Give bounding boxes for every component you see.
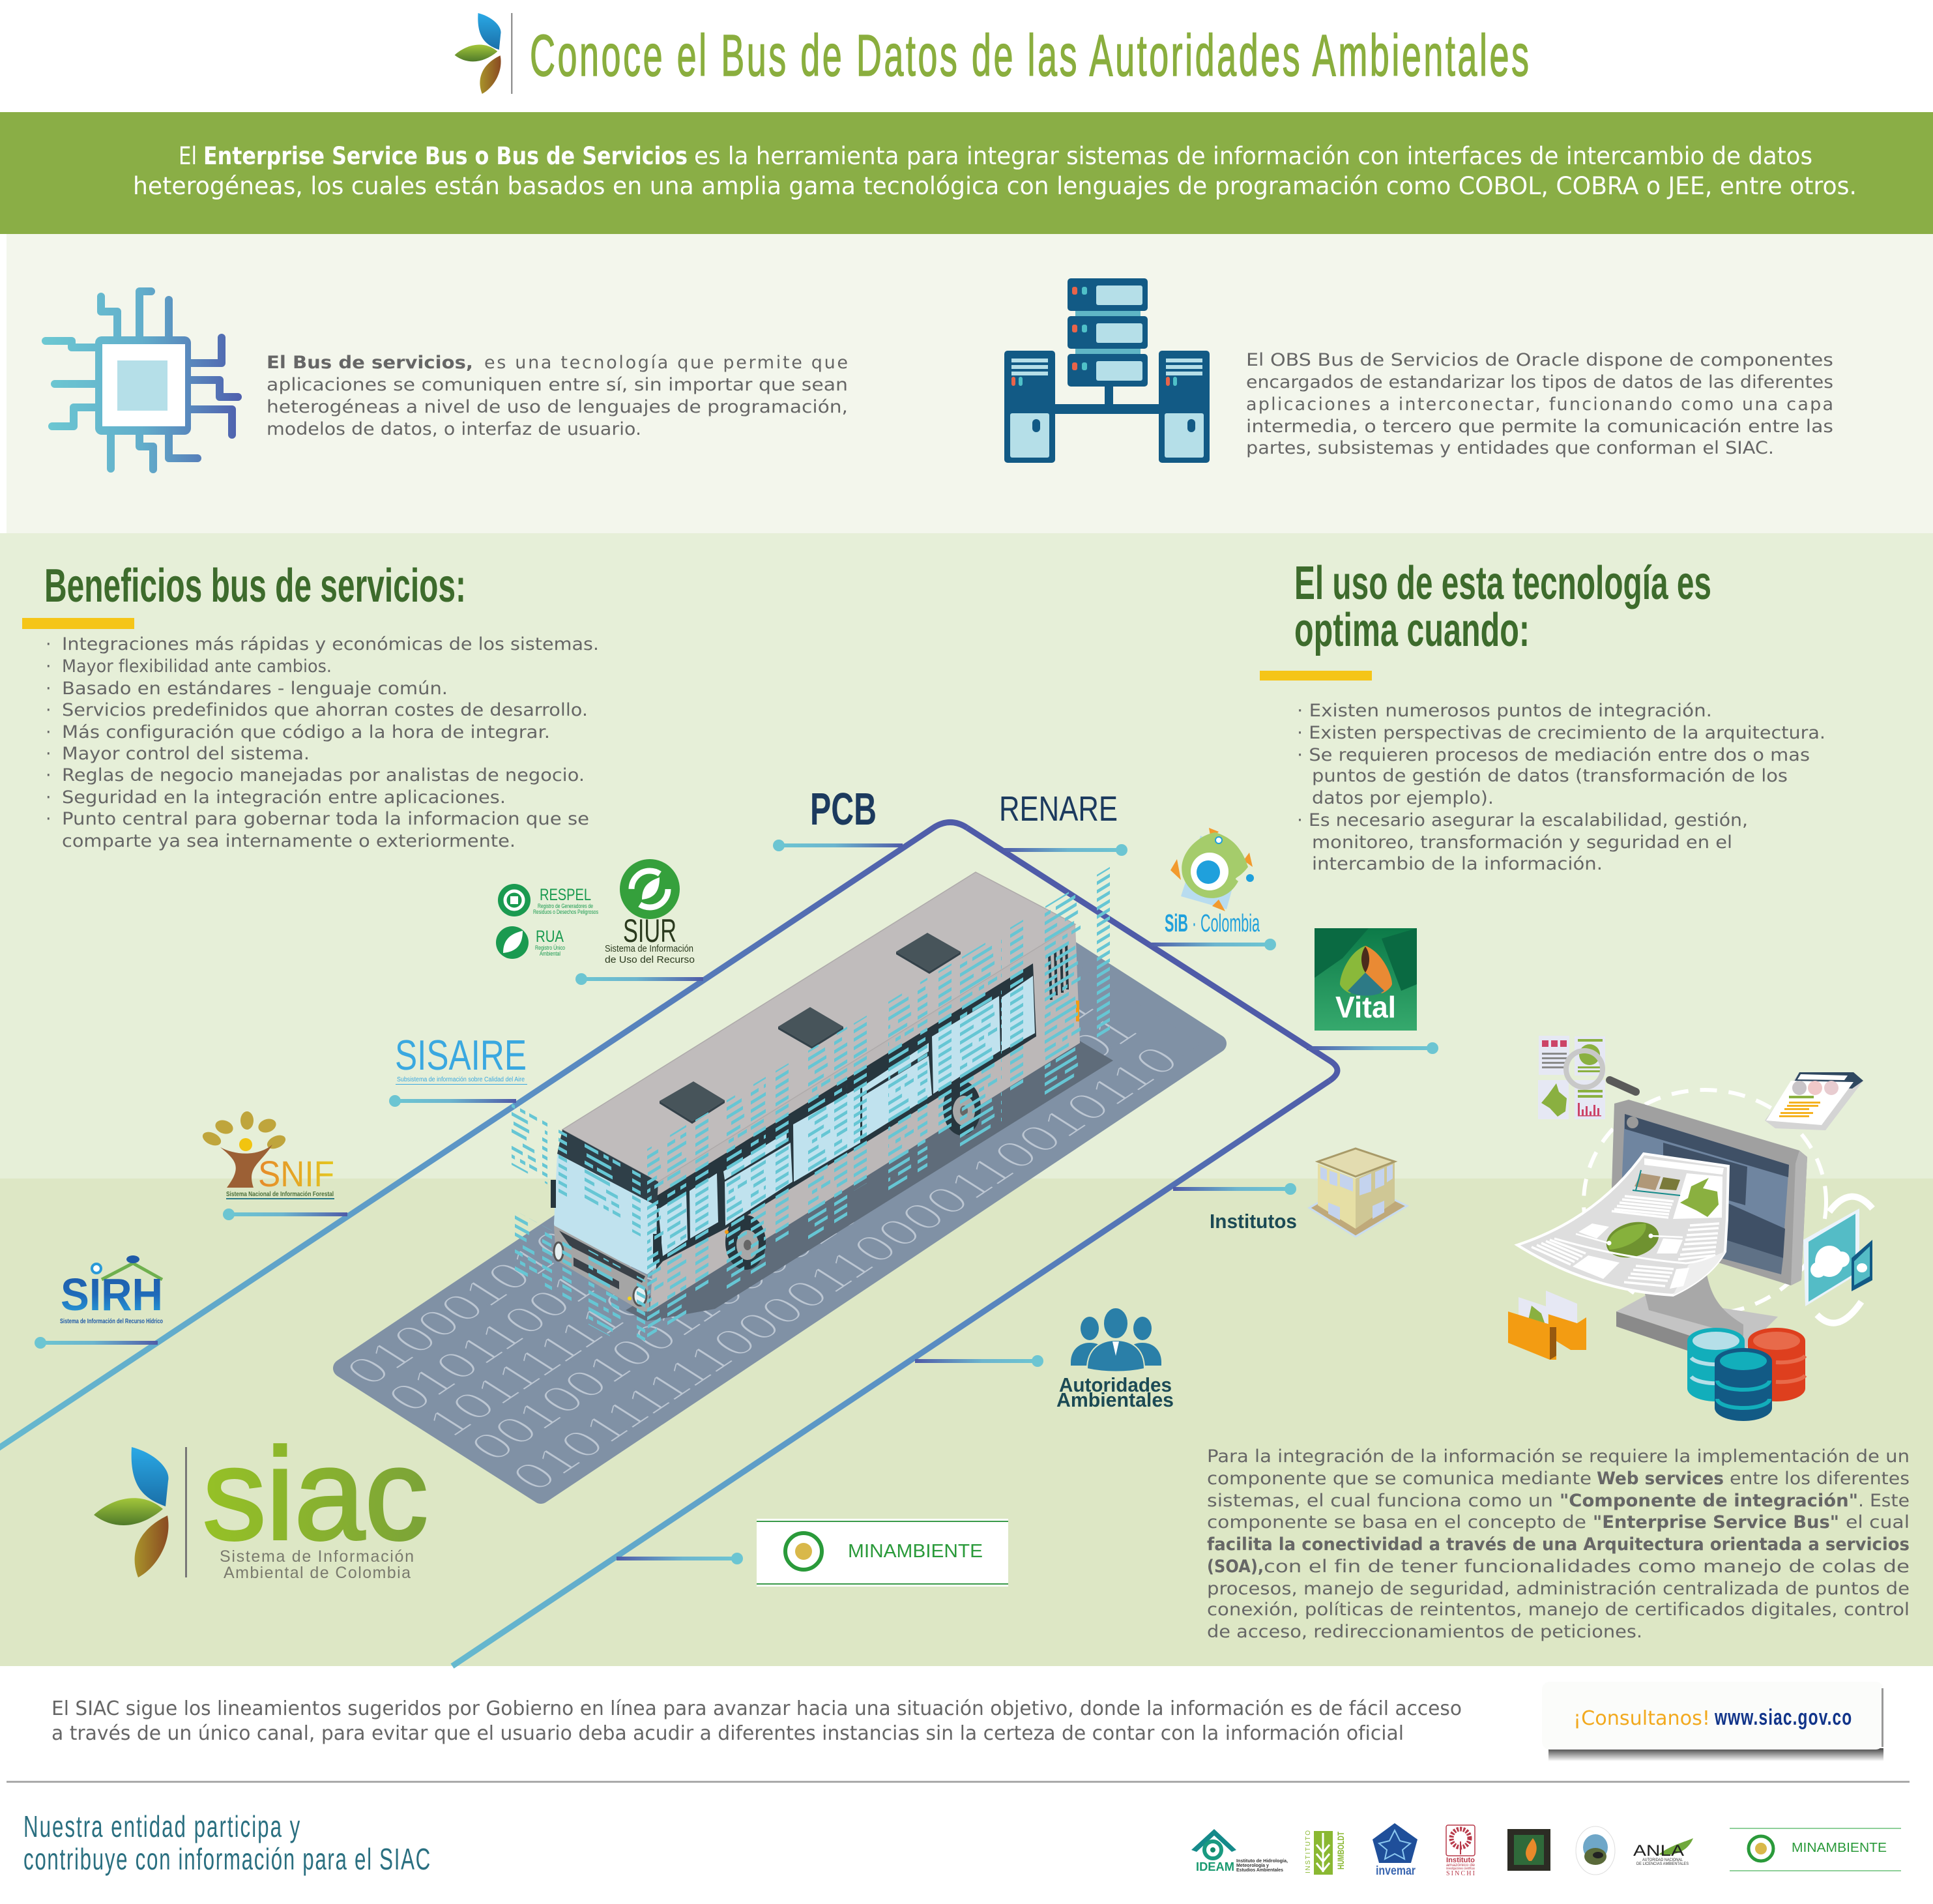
list: beneficios: Seguridad en la integración entre aplicaciones. [62, 787, 506, 808]
list: beneficios: · [46, 722, 51, 742]
logo: RUA: Registro Único [535, 945, 565, 951]
title: Conoce el Bus de Datos de las Autoridades Ambientales [530, 23, 1529, 88]
label: Autoridades Ambientales: Ambientales [1056, 1388, 1174, 1411]
logo: Invemar: invemar [1376, 1864, 1416, 1878]
logo: Minambiente footer: MINAMBIENTE [1792, 1841, 1887, 1855]
text: El Bus de servicios: El Bus de servicios, [267, 353, 473, 373]
logo: ANLA: DE LICENCIAS AMBIENTALES [1636, 1862, 1689, 1866]
logo: SIAC large: Sistema de Información [220, 1547, 414, 1566]
label: PCB: PCB [810, 784, 877, 834]
text: integracion paragraph: componente se basa en el concepto de [1207, 1512, 1586, 1532]
logo: Minambiente box: MINAMBIENTE [848, 1541, 983, 1562]
text: OBS Oracle [1246, 350, 1833, 458]
text: integracion paragraph: entre los diferentes [1730, 1469, 1910, 1489]
list: beneficios: Servicios predefinidos que ahorran costes de desarrollo. [62, 700, 588, 720]
text: footer statement: El SIAC sigue los lineamientos sugeridos por Gobierno en línea para avanzar hacia una situación objetivo, donde la información es de fácil acceso [51, 1697, 1462, 1720]
connector: SIUR [575, 973, 703, 985]
list: beneficios: Mayor flexibilidad ante cambios. [62, 656, 332, 677]
logo: SIAC large [94, 1422, 428, 1582]
road with binary digits: 0010010011000010001010110001 [458, 1008, 1150, 1469]
text: integracion paragraph: el cual [1846, 1512, 1910, 1532]
text: footer statement: a través de un único canal, para evitar que el usuario deba acudir a diferentes instancias sin la certeza de contar con la información oficial [51, 1722, 1404, 1745]
connector: Minambiente [617, 1553, 743, 1564]
logo: SIRH: Sistema de Información del Recurso Hídrico [60, 1318, 163, 1325]
illustration: notebook [1765, 1072, 1863, 1130]
illustration: database cylinders [1687, 1328, 1805, 1421]
connector: Autoridades [915, 1355, 1043, 1367]
logo: SIRH: SIRH [61, 1269, 163, 1320]
list: beneficios: Punto central para gobernar toda la informacion que se [62, 809, 589, 829]
connector: SIRH [35, 1337, 158, 1349]
icon: servers [1004, 278, 1210, 463]
text: integracion paragraph: de acceso, redireccionamientos de peticiones. [1207, 1622, 1642, 1642]
heading: uso tecnologia: El uso de esta tecnología es [1294, 557, 1711, 609]
intro text: es la herramienta para integrar sistemas de información con interfaces de intercambio de datos [694, 142, 1812, 170]
heading: beneficios: Beneficios bus de servicios: [44, 560, 466, 612]
logo: IDEAM: Meteorología y [1236, 1862, 1270, 1868]
logo: Humboldt [1305, 1830, 1346, 1875]
text: El Bus de servicios: modelos de datos, o interfaz de usuario. [267, 419, 641, 439]
panel: intro band background [0, 112, 1933, 234]
logo: ANLA: AUTORIDAD NACIONAL [1642, 1858, 1683, 1862]
text: integracion paragraph: conexión, políticas de reintentos, manejo de certificados digitales, control [1207, 1600, 1910, 1620]
text: El Bus de servicios [267, 353, 848, 439]
text: OBS Oracle: aplicaciones a interconectar, funcionando como una capa [1246, 394, 1833, 415]
heading: uso tecnologia: optima cuando: [1294, 604, 1530, 656]
text: El Bus de servicios: heterogéneas a nivel de uso de lenguajes de programación, [267, 397, 848, 417]
list: beneficios: Integraciones más rápidas y económicas de los sistemas. [62, 634, 599, 654]
label: Autoridades Ambientales: Autoridades [1059, 1373, 1172, 1396]
panel: lower green background [0, 1179, 1933, 1666]
logo: Vital [1315, 928, 1417, 1031]
list: uso tecnologia: · Existen numerosos puntos de integración. [1297, 701, 1712, 721]
text: nuestra entidad: Nuestra entidad participa y [23, 1810, 300, 1844]
text: integracion paragraph [1207, 1446, 1910, 1642]
road with binary digits: 1011111100100011100101101001 [415, 984, 1107, 1444]
logo: SIUR: Sistema de Información [605, 943, 693, 954]
accent bar: uso [1260, 671, 1372, 681]
logo: Invemar [1373, 1823, 1417, 1878]
logo: Humboldt: INSTITUTO [1305, 1830, 1312, 1873]
logo: Minambiente footer [1730, 1828, 1901, 1871]
logo: Sinchi: Instituto [1446, 1856, 1475, 1864]
logo: header SIAC leaves [455, 13, 512, 94]
logo: ANLA [1633, 1838, 1693, 1866]
logo: SIUR [605, 859, 695, 965]
text: integracion paragraph: sistemas, el cual funciona como un [1207, 1491, 1553, 1511]
logo: Sinchi: investigaciones científicas [1446, 1867, 1475, 1871]
connector: RENARE [1002, 844, 1127, 856]
list: beneficios: · [46, 656, 51, 677]
logo: SIUR: SIUR [623, 913, 676, 949]
text: integracion paragraph: procesos, manejo de seguridad, administración centralizada de puntos de [1207, 1579, 1910, 1599]
label: RENARE: RENARE [999, 789, 1118, 828]
logo: Minambiente box [757, 1519, 1008, 1587]
logo: Vital: Vital [1335, 990, 1396, 1024]
bus illustration [551, 872, 1113, 1321]
list: beneficios: · [46, 765, 51, 785]
label: Institutos: Institutos [1210, 1210, 1297, 1233]
logo: SiB Colombia [1165, 828, 1260, 937]
list: uso tecnologia: intercambio de la información. [1312, 854, 1603, 874]
text: integracion paragraph: con el fin de tener funcionalidades como manejo de colas de [1264, 1557, 1910, 1577]
logo: SISAIRE: SISAIRE [395, 1031, 527, 1079]
list: uso tecnologia [1297, 701, 1825, 874]
connector: Institutos [1173, 1183, 1296, 1195]
list: beneficios: Basado en estándares - lenguaje común. [62, 679, 448, 699]
logo: Parques [1576, 1826, 1615, 1875]
logo: SiB Colombia: SiB · Colombia [1165, 910, 1260, 937]
logo: IDEAM: Estudios Ambientales [1236, 1867, 1283, 1873]
logo: IDEAM: IDEAM [1196, 1860, 1234, 1873]
illustration: tablet and phone [1803, 1197, 1872, 1323]
logo: SIRH [60, 1255, 163, 1325]
text: nuestra entidad [23, 1810, 430, 1877]
logo: RESPEL [498, 884, 598, 916]
text: footer statement [51, 1697, 1462, 1745]
text: El Bus de servicios: es una tecnología que permite que [484, 353, 848, 373]
text: integracion paragraph: facilita la conectividad a través de una Arquitectura orientada a servicios [1207, 1534, 1910, 1555]
callout: consultanos [1542, 1682, 1883, 1761]
text: integracion paragraph: componente que se comunica mediante [1207, 1469, 1591, 1489]
connector: SISAIRE [389, 1095, 516, 1107]
accent bar: beneficios [22, 618, 134, 629]
logo: Humboldt: HUMBOLDT [1335, 1832, 1346, 1869]
road with binary digits [334, 916, 1217, 1499]
list: uso tecnologia: · Se requieren procesos de mediación entre dos o mas [1297, 745, 1810, 765]
label: Autoridades Ambientales [1056, 1373, 1174, 1411]
illustration: computer with data [1584, 1090, 1826, 1369]
logo: Sinchi: amazónico de [1446, 1864, 1475, 1867]
logo: RESPEL: Registro de Generadores de [538, 903, 593, 909]
logo: Sinchi: SINCHI [1446, 1870, 1475, 1877]
text: El Bus de servicios: aplicaciones se comuniquen entre sí, sin importar que sean [267, 375, 848, 395]
intro text: heterogéneas, los cuales están basados en una amplia gama tecnológica con lenguajes de programación como COBOL, COBRA o JEE, entre otros. [133, 172, 1857, 200]
logo: SNIF: Sistema Nacional de Información Forestal [226, 1191, 334, 1198]
logo: IDEAM: Instituto de Hidrología, [1236, 1858, 1288, 1864]
intro text: Enterprise Service Bus o Bus de Servicios [203, 142, 688, 170]
heading: uso tecnologia [1294, 557, 1711, 656]
text: integracion paragraph: "Componente de integración" [1560, 1491, 1858, 1511]
logo: Sinchi [1446, 1825, 1475, 1877]
logo: RESPEL: Residuos o Desechos Peligrosos [533, 909, 598, 915]
text: integracion paragraph: Para la integración de la información se requiere la implementación de un [1207, 1446, 1910, 1467]
list: beneficios: · [46, 744, 51, 764]
list: beneficios: Mayor control del sistema. [62, 744, 310, 764]
list: beneficios: · [46, 787, 51, 808]
list: beneficios: · [46, 700, 51, 720]
logo: SIAC large: Ambiental de Colombia [224, 1564, 411, 1582]
text: integracion paragraph: "Enterprise Service Bus" [1593, 1512, 1839, 1532]
text: OBS Oracle: partes, subsistemas y entidades que conforman el SIAC. [1246, 438, 1774, 458]
icon: building [1309, 1149, 1407, 1237]
icon: authorities people [1071, 1308, 1161, 1371]
text: integracion paragraph: . Este [1858, 1491, 1910, 1511]
loop connector line [0, 823, 1337, 1666]
road with binary digits: 0101111110000110000110010110 [500, 1038, 1191, 1499]
road with binary digits: 0101100101110001010010111011 [375, 959, 1067, 1420]
logo: IIAP [1507, 1829, 1550, 1871]
connector: SiB [1148, 939, 1276, 950]
list: beneficios: · [46, 679, 51, 699]
text: integracion paragraph: Web services [1597, 1469, 1724, 1489]
data dash overlay [512, 867, 1110, 1345]
panel: upper green background [0, 533, 1933, 1179]
callout: consultanos: ¡Consultanos! [1573, 1707, 1710, 1730]
list: beneficios [46, 634, 599, 851]
list: uso tecnologia: datos por ejemplo). [1312, 788, 1494, 808]
text: OBS Oracle: intermedia, o tercero que permite la comunicación entre las [1246, 417, 1833, 437]
list: uso tecnologia: · Existen perspectivas de crecimiento de la arquitectura. [1297, 723, 1825, 743]
text: OBS Oracle: encargados de estandarizar los tipos de datos de las diferentes [1246, 372, 1833, 392]
list: uso tecnologia: · Es necesario asegurar la escalabilidad, gestión, [1297, 810, 1748, 830]
connector: Vital [1307, 1042, 1438, 1054]
intro text [133, 142, 1857, 200]
text: integracion paragraph: (SOA), [1207, 1557, 1264, 1577]
panel: light explanation background [7, 234, 1933, 533]
illustration: printed report page [1517, 1154, 1728, 1295]
list: beneficios: comparte ya sea internamente o exteriormente. [62, 831, 516, 851]
illustration: report pages with magnifier [1538, 1036, 1636, 1119]
list: beneficios: · [46, 809, 51, 829]
list: uso tecnologia: monitoreo, transformación y seguridad en el [1312, 832, 1732, 853]
illustration: orange folders [1508, 1291, 1586, 1360]
list: uso tecnologia: puntos de gestión de datos (transformación de los [1312, 766, 1788, 786]
logo: RUA: Ambiental [540, 950, 560, 957]
logo: IDEAM [1191, 1829, 1288, 1873]
connector: PCB [773, 840, 903, 851]
logo: RESPEL: RESPEL [540, 886, 591, 904]
text: nuestra entidad: contribuye con información para el SIAC [23, 1843, 430, 1877]
list: beneficios: · [46, 634, 51, 654]
list: beneficios: Más configuración que código a la hora de integrar. [62, 722, 550, 742]
logo: SNIF [201, 1111, 334, 1199]
icon: circuit chip [46, 291, 238, 469]
intro text: El [179, 142, 197, 170]
road with binary digits: 0100010101001100101011011100 [334, 933, 1025, 1393]
callout: consultanos: www.siac.gov.co [1714, 1705, 1852, 1730]
connector: SNIF [223, 1208, 347, 1220]
logo: SISAIRE: Subsistema de información sobre Calidad del Aire [397, 1076, 525, 1083]
logo: ANLA: ANLA [1633, 1842, 1684, 1860]
list: beneficios: Reglas de negocio manejadas por analistas de negocio. [62, 765, 585, 785]
logo: SIUR: de Uso del Recurso [605, 954, 695, 965]
logo: SIAC large: siac [203, 1422, 428, 1567]
text: OBS Oracle: El OBS Bus de Servicios de Oracle dispone de componentes [1246, 350, 1833, 370]
logo: RUA: RUA [536, 928, 564, 946]
logo: RUA [496, 926, 565, 959]
logo: SNIF: SNIF [258, 1153, 334, 1194]
